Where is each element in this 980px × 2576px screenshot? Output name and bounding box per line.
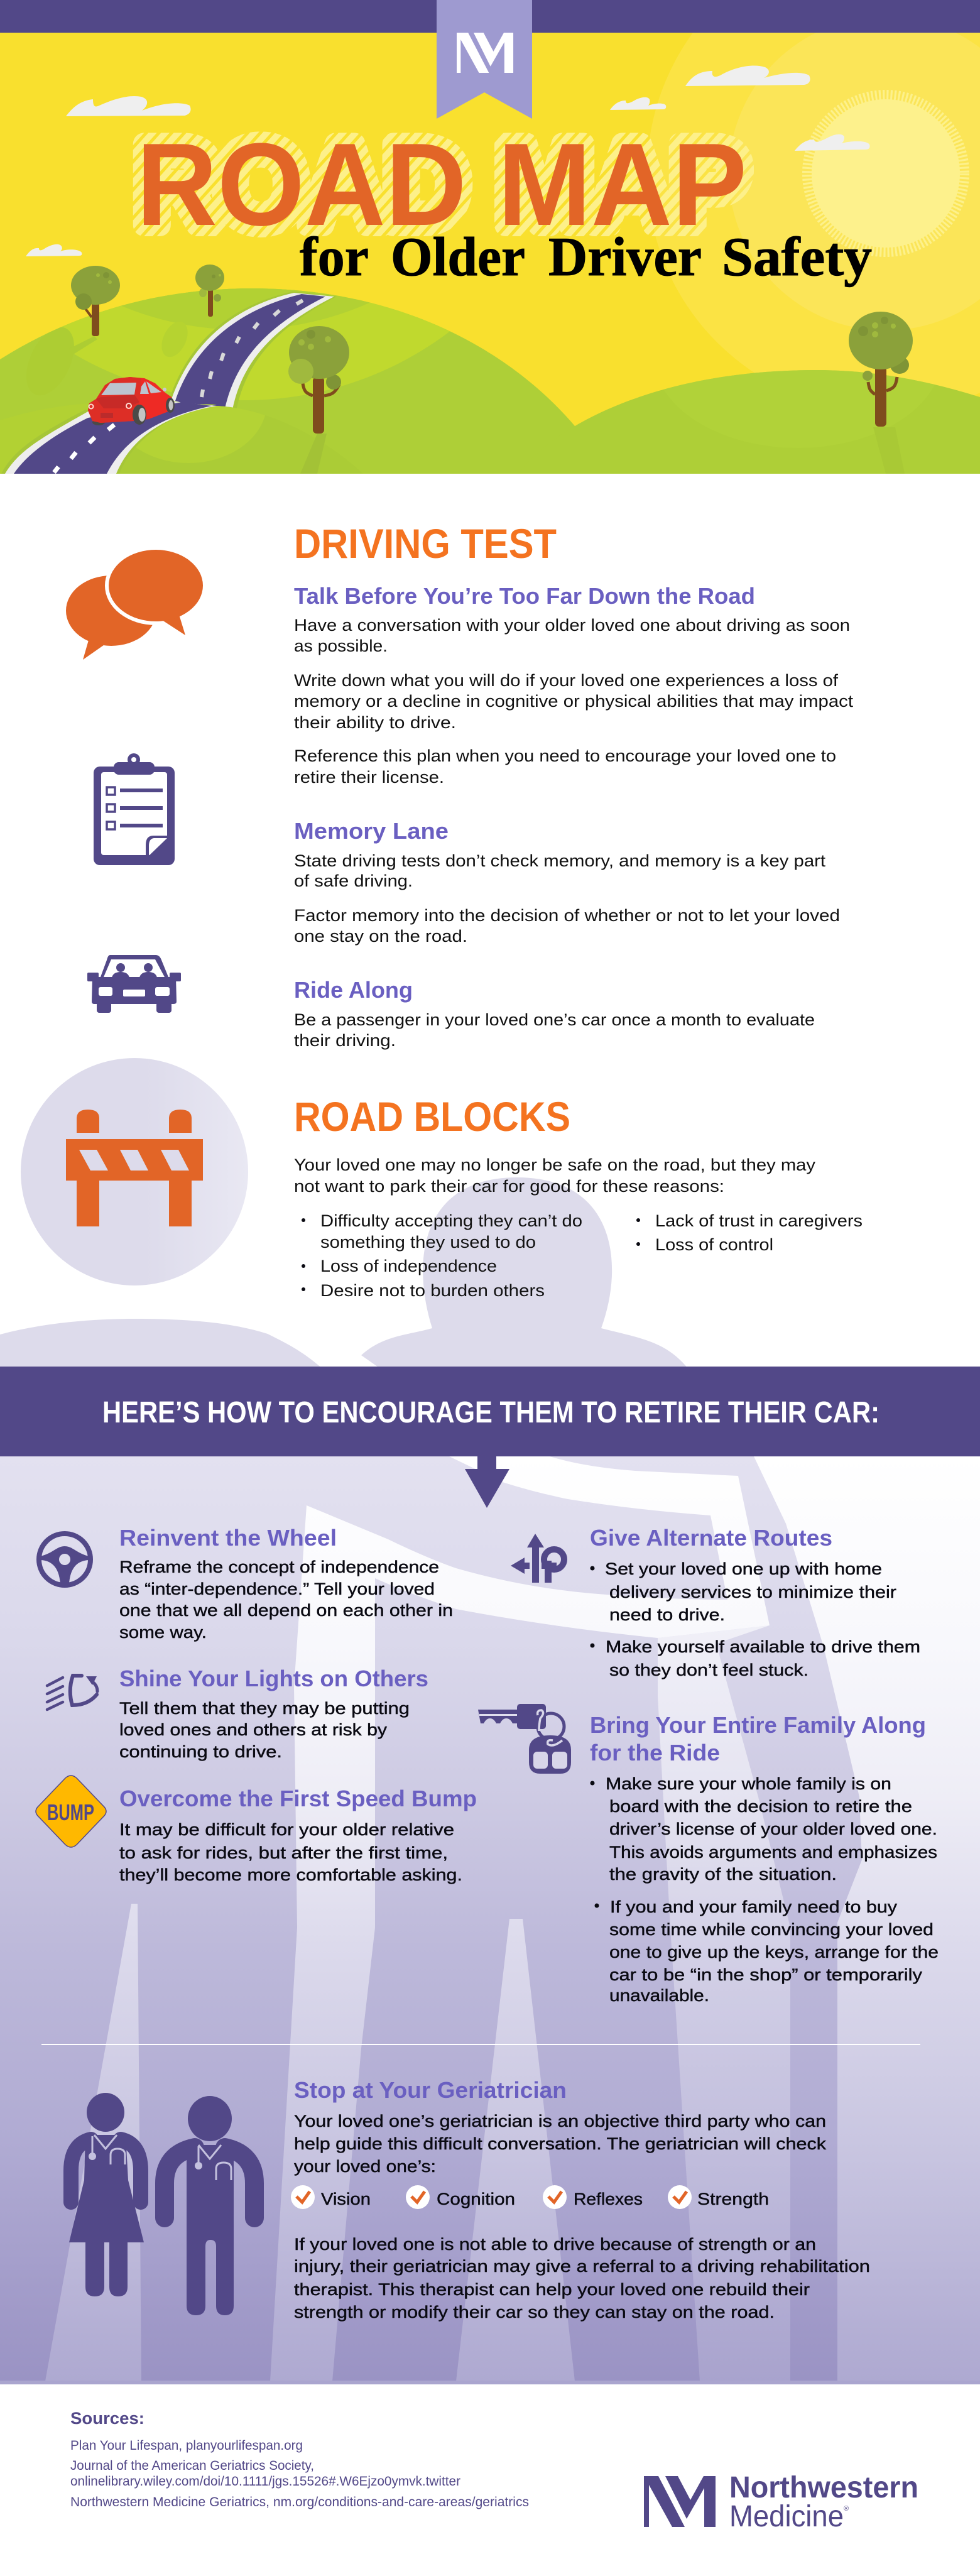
block: bring your family: Make sure your whole family is on [606, 1774, 891, 1793]
icon: headlight [47, 1676, 97, 1710]
checklist: Vision [321, 2190, 371, 2208]
block: alternate routes [511, 1525, 920, 1679]
block: alternate routes: Make yourself available to drive them [606, 1637, 920, 1656]
sun [809, 97, 962, 250]
block: bring your family: Bring Your Entire Family Along [590, 1712, 926, 1738]
text: talk before: memory or a decline in cognitive or physical abilities that may impact [294, 692, 854, 711]
text: talk before: as possible. [294, 636, 388, 655]
arrow: down [465, 1456, 509, 1508]
block: stop at your geriatrician: your loved one’s: [294, 2157, 436, 2176]
list: reasons left column: Desire not to burden others [320, 1281, 545, 1300]
block: reinvent the wheel: some way. [119, 1623, 207, 1642]
block: stop at your geriatrician [69, 2077, 870, 2322]
ribbon with NM logo [437, 0, 532, 119]
text: ride along: Ride Along [294, 977, 413, 1003]
subtitle: for [300, 227, 369, 288]
icon: bump sign [36, 1776, 106, 1847]
icon: road barrier in circle [21, 1058, 248, 1285]
front hill [205, 406, 327, 474]
sources: onlinelibrary.wiley.com/doi/10.1111/jgs.15526#.W6Ejzo0ymvk.twitter [70, 2474, 460, 2489]
list: reasons left column: Loss of independence [320, 1257, 497, 1275]
block: reinvent the wheel [39, 1525, 453, 1642]
panel: driving test [66, 520, 854, 1050]
sources: Plan Your Lifespan, planyourlifespan.org [70, 2438, 303, 2453]
text: memory lane: Factor memory into the decision of whether or not to let your loved [294, 906, 840, 925]
text: memory lane [294, 818, 840, 946]
block: stop at your geriatrician: therapist. This therapist can help your loved one rebuild their [294, 2280, 810, 2299]
block: stop at your geriatrician: injury, their geriatrician may give a referral to a driving rehabilitation [294, 2257, 870, 2276]
hills [0, 288, 980, 474]
block: shine your lights: Tell them that they may be putting [119, 1699, 410, 1718]
block: bring your family: some time while convincing your loved [609, 1920, 934, 1939]
block: stop at your geriatrician: If your loved one is not able to drive because of strength or an [294, 2235, 816, 2254]
text: ride along: their driving. [294, 1031, 396, 1050]
background: silhouette panel [0, 1456, 980, 2384]
icon: two doctors [69, 2093, 254, 2315]
top purple band [0, 0, 980, 33]
icon: route arrows [511, 1534, 564, 1583]
list: reasons left column [302, 1211, 582, 1300]
panel: road blocks [21, 1058, 863, 1300]
block: reinvent the wheel: Reframe the concept of independence [119, 1558, 439, 1576]
block: alternate routes: Set your loved one up with home [605, 1559, 882, 1578]
text: talk before: Have a conversation with your older loved one about driving as soon [294, 616, 850, 635]
road far section [168, 292, 337, 411]
list: reasons left column: Difficulty accepting they can’t do [320, 1211, 582, 1230]
trees [71, 265, 913, 434]
icon: bump sign: BUMP [47, 1799, 94, 1825]
block: shine your lights: continuing to drive. [119, 1742, 282, 1761]
block: bring your family: unavailable. [609, 1986, 709, 2005]
checklist [291, 2185, 769, 2209]
block: shine your lights [47, 1666, 428, 1761]
block: overcome speed bump: to ask for rides, but after the first time, [119, 1843, 448, 1862]
text: ride along [294, 977, 815, 1050]
block: overcome speed bump: It may be difficult for your older relative [119, 1820, 454, 1839]
subtitle [300, 227, 872, 288]
text: talk before: Write down what you will do if your loved one experiences a loss of [294, 671, 839, 690]
icon: car front [87, 955, 181, 1013]
icon: clipboard [94, 753, 175, 865]
subtitle: Driver [548, 227, 702, 288]
block: bring your family: This avoids arguments and emphasizes [609, 1843, 937, 1862]
title: road map: ROAD MAP [136, 119, 747, 250]
checklist: Reflexes [574, 2190, 643, 2208]
block: bring your family: for the Ride [590, 1740, 720, 1766]
text: memory lane: one stay on the road. [294, 927, 467, 946]
silhouette: people shoulders [0, 1177, 688, 1368]
icon: car keys [478, 1704, 571, 1774]
text: talk before: retire their license. [294, 768, 444, 787]
text: memory lane: of safe driving. [294, 871, 413, 890]
header illustration [0, 0, 980, 474]
logo: northwestern medicine [644, 2471, 918, 2533]
sources: Sources: [70, 2409, 144, 2428]
clouds [26, 65, 870, 256]
text: road blocks intro [294, 1155, 816, 1196]
block: stop at your geriatrician: help guide this difficult conversation. The geriatrician will check [294, 2134, 827, 2153]
text: talk before: their ability to drive. [294, 713, 456, 732]
heading: driving test: DRIVING TEST [294, 520, 557, 567]
block: overcome speed bump: they’ll become more comfortable asking. [119, 1865, 462, 1884]
icon: steering wheel [39, 1534, 90, 1585]
block: bring your family: one to give up the keys, arrange for the [609, 1943, 939, 1962]
red car [88, 377, 175, 425]
block: stop at your geriatrician: Stop at Your Geriatrician [294, 2077, 567, 2103]
block: bring your family: driver’s license of your older loved one. [609, 1820, 937, 1838]
text: memory lane: State driving tests don’t check memory, and memory is a key part [294, 851, 826, 870]
block: overcome speed bump [36, 1776, 477, 1884]
icon: speech bubbles [66, 546, 207, 660]
road near section [1, 402, 217, 474]
block: alternate routes: so they don’t feel stuck. [609, 1661, 808, 1679]
block: shine your lights: Shine Your Lights on Others [119, 1666, 428, 1691]
block: bring your family [478, 1704, 939, 2005]
block: bring your family: car to be “in the shop” or temporarily [609, 1965, 923, 1984]
text: talk before: Talk Before You’re Too Far Down the Road [294, 583, 755, 609]
subtitle: Safety [722, 227, 872, 288]
block: stop at your geriatrician: strength or modify their car so they can stay on the road. [294, 2303, 775, 2322]
block: bring your family: If you and your family need to buy [610, 1897, 898, 1916]
list: reasons right column: Loss of control [655, 1235, 773, 1254]
subtitle: Older [391, 227, 525, 288]
text: memory lane: Memory Lane [294, 818, 449, 844]
checklist: Cognition [437, 2190, 515, 2208]
logo: northwestern medicine: Northwestern [729, 2471, 918, 2504]
list: reasons right column [636, 1211, 863, 1254]
text: talk before [294, 583, 854, 787]
block: shine your lights: loved ones and others at risk by [119, 1720, 388, 1739]
block: bring your family: the gravity of the situation. [609, 1865, 837, 1884]
logo: northwestern medicine: Medicine [729, 2500, 844, 2533]
heading: road blocks: ROAD BLOCKS [294, 1093, 570, 1140]
block: alternate routes: Give Alternate Routes [590, 1525, 832, 1551]
banner: encourage them [0, 1367, 980, 1456]
logo: northwestern medicine: ® [844, 2505, 849, 2513]
text: road blocks intro: Your loved one may no longer be safe on the road, but they may [294, 1155, 816, 1174]
sources: Journal of the American Geriatrics Society, [70, 2459, 314, 2473]
block: reinvent the wheel: Reinvent the Wheel [119, 1525, 337, 1551]
block: reinvent the wheel: one that we all depend on each other in [119, 1601, 453, 1620]
sun glow rings [648, 33, 980, 395]
list: reasons right column: Lack of trust in caregivers [655, 1211, 863, 1230]
text: talk before: Reference this plan when you need to encourage your loved one to [294, 746, 836, 765]
sources [70, 2409, 529, 2509]
banner: encourage them: HERE’S HOW TO ENCOURAGE THEM TO RETIRE THEIR CAR: [102, 1396, 879, 1429]
checklist: Strength [697, 2190, 769, 2208]
text: road blocks intro: not want to park their car for good for these reasons: [294, 1177, 724, 1196]
sources: Northwestern Medicine Geriatrics, nm.org/conditions-and-care-areas/geriatrics [70, 2495, 529, 2509]
block: overcome speed bump: Overcome the First Speed Bump [119, 1786, 477, 1811]
block: alternate routes: delivery services to minimize their [609, 1583, 896, 1602]
list: reasons left column: something they used to do [320, 1233, 536, 1252]
text: ride along: Be a passenger in your loved one’s car once a month to evaluate [294, 1010, 815, 1029]
block: stop at your geriatrician: Your loved one’s geriatrician is an objective third party who can [294, 2112, 826, 2131]
block: alternate routes: need to drive. [609, 1605, 725, 1624]
block: bring your family: board with the decision to retire the [609, 1797, 912, 1816]
block: reinvent the wheel: as “inter-dependence.” Tell your loved [119, 1580, 435, 1598]
